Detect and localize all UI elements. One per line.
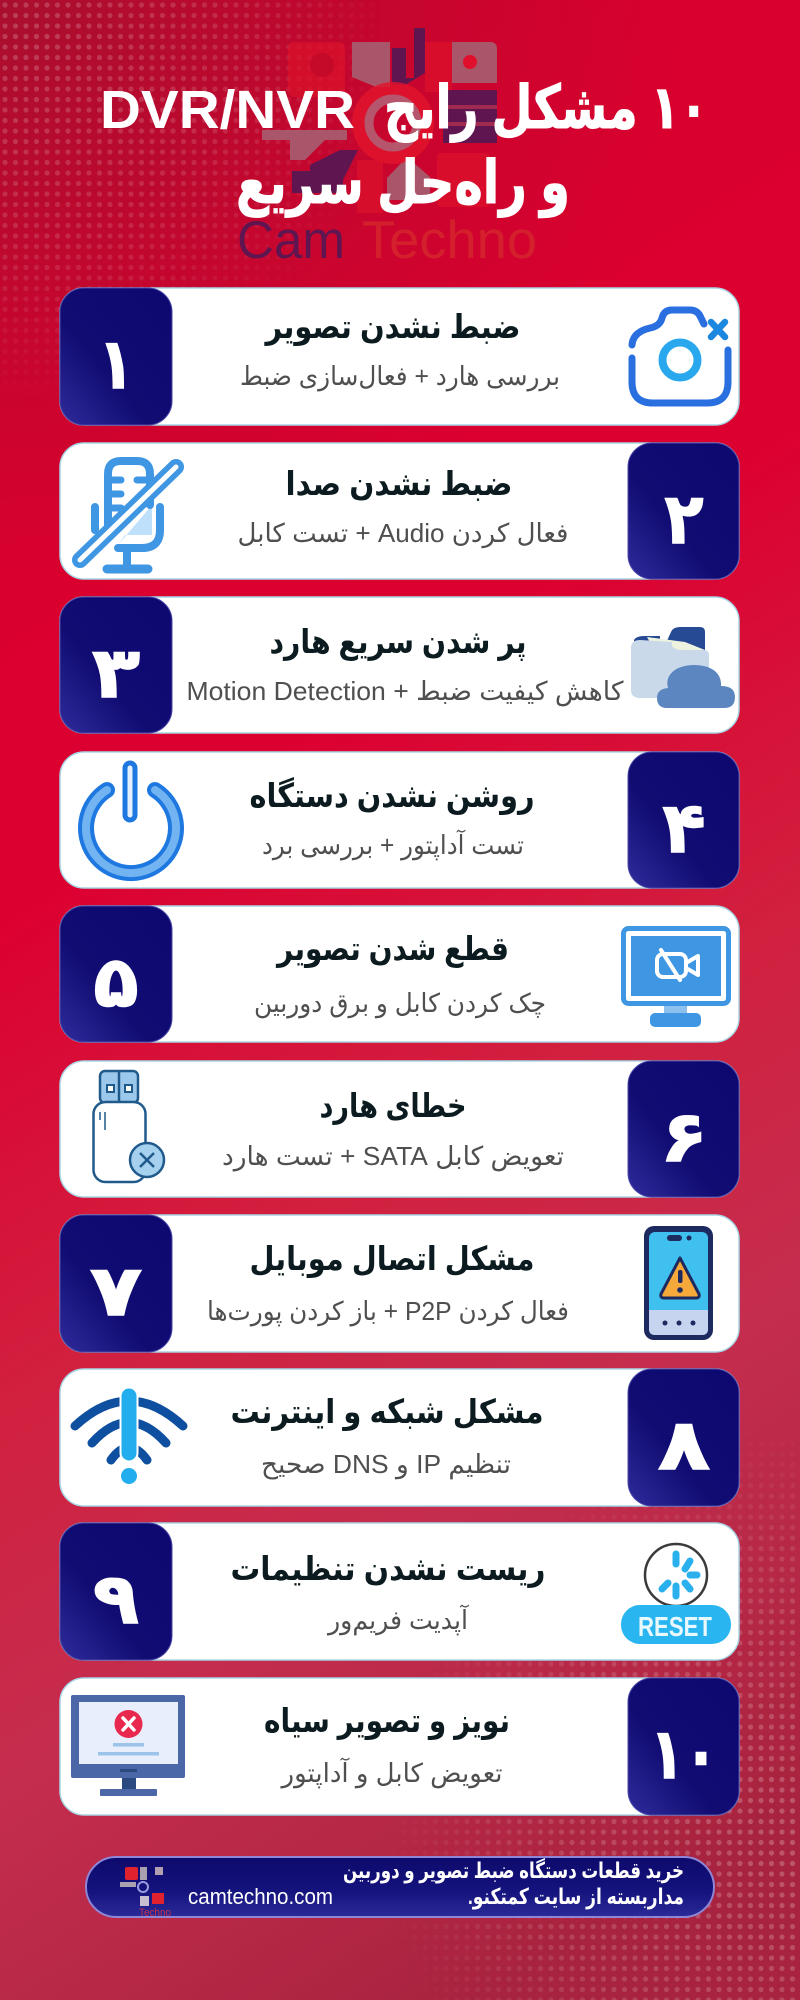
panel: problem 1: ضبط نشدن تصویر xyxy=(264,308,520,347)
panel: problem 1 xyxy=(60,288,739,425)
website: camtechno.com xyxy=(188,1884,333,1909)
panel: problem 1: بررسی هارد + فعال‌سازی ضبط xyxy=(240,361,560,392)
watermark logo: Techno xyxy=(362,211,537,270)
panel: problem 7: مشکل اتصال موبایل xyxy=(250,1240,534,1279)
panel: problem 4: ۴ xyxy=(662,789,706,867)
title: DVR/NVR xyxy=(100,80,355,140)
icon: power button xyxy=(86,768,176,873)
panel: problem 4: روشن نشدن دستگاه xyxy=(250,776,534,816)
panel: problem 6: تعویض کابل SATA + تست هارد xyxy=(222,1141,564,1172)
panel: problem 3 xyxy=(60,597,739,733)
panel: problem 5: ۵ xyxy=(94,943,138,1021)
panel: problem 3: پر شدن سریع هارد xyxy=(270,623,526,662)
panel: problem 9: آپدیت فریم‌ور xyxy=(326,1604,470,1636)
panel: problem 8: مشکل شبکه و اینترنت xyxy=(230,1393,544,1432)
icon: reset button: RESET xyxy=(638,1611,712,1642)
icon: muted microphone xyxy=(80,461,176,569)
panel: problem 4 xyxy=(60,752,739,888)
icon: wifi warning xyxy=(75,1396,183,1484)
panel: problem 7: ۷ xyxy=(90,1252,142,1330)
panel: problem 5: قطع شدن تصویر xyxy=(275,930,509,969)
panel: problem 9: ریست نشدن تنظیمات xyxy=(230,1550,546,1588)
panel: problem 9: ۹ xyxy=(93,1560,139,1638)
icon: reset button xyxy=(621,1544,731,1644)
panel: problem 7 xyxy=(60,1215,739,1352)
title xyxy=(100,74,708,218)
panel: problem 10: تعویض کابل و آداپتور xyxy=(279,1757,502,1789)
panel: problem 2: فعال کردن Audio + تست کابل xyxy=(237,518,568,549)
banner text: مداربسته از سایت کمتکنو. xyxy=(468,1884,684,1910)
panel: problem 3: ۳ xyxy=(92,634,140,712)
banner logo: Techno xyxy=(139,1907,171,1919)
banner text xyxy=(343,1857,684,1910)
panel: problem 6: ۶ xyxy=(660,1098,708,1176)
icon: usb drive with error xyxy=(94,1071,164,1182)
panel: problem 7: فعال کردن P2P + باز کردن پورت‌ها xyxy=(207,1296,569,1327)
panel: problem 5: چک کردن کابل و برق دوربین xyxy=(254,988,546,1019)
panel: problem 2: ضبط نشدن صدا xyxy=(286,465,512,502)
panel: problem 10: نویز و تصویر سیاه xyxy=(264,1702,510,1741)
watermark logo: Cam xyxy=(237,211,345,270)
panel: problem 2: ۲ xyxy=(664,480,704,558)
panel: problem 6 xyxy=(60,1061,739,1197)
icon: monitor with camera off xyxy=(624,928,728,1027)
panel: problem 8: ۸ xyxy=(658,1406,710,1484)
banner logo xyxy=(120,1867,171,1919)
title: و راه‌حل سریع xyxy=(236,149,570,218)
banner text: خرید قطعات دستگاه ضبط تصویر و دوربین xyxy=(343,1857,684,1884)
panel: problem 5 xyxy=(60,906,739,1042)
panel: problem 4: تست آداپتور + بررسی برد xyxy=(262,829,524,861)
title: ۱۰ مشکل رایج xyxy=(384,74,708,143)
watermark logo xyxy=(237,28,537,270)
panel: problem 1: ۱ xyxy=(98,325,134,403)
panel: problem 6: خطای هارد xyxy=(320,1087,466,1125)
panel: problem 10: ۱۰ xyxy=(650,1715,718,1793)
icon: camera with x xyxy=(632,310,728,403)
panel: problem 8 xyxy=(60,1369,739,1506)
panel: problem 3: کاهش کیفیت ضبط + Motion Detection xyxy=(186,676,624,706)
panel: problem 8: تنظیم IP و DNS صحیح xyxy=(261,1449,511,1480)
panel: problem 10 xyxy=(60,1678,739,1815)
panel: problem 2 xyxy=(60,443,739,579)
banner: call to action xyxy=(86,1857,714,1919)
icon: folder and cloud xyxy=(631,627,735,708)
icon: monitor with error xyxy=(71,1695,185,1796)
icon: phone with warning xyxy=(644,1226,713,1340)
panel: problem 9 xyxy=(60,1523,739,1660)
